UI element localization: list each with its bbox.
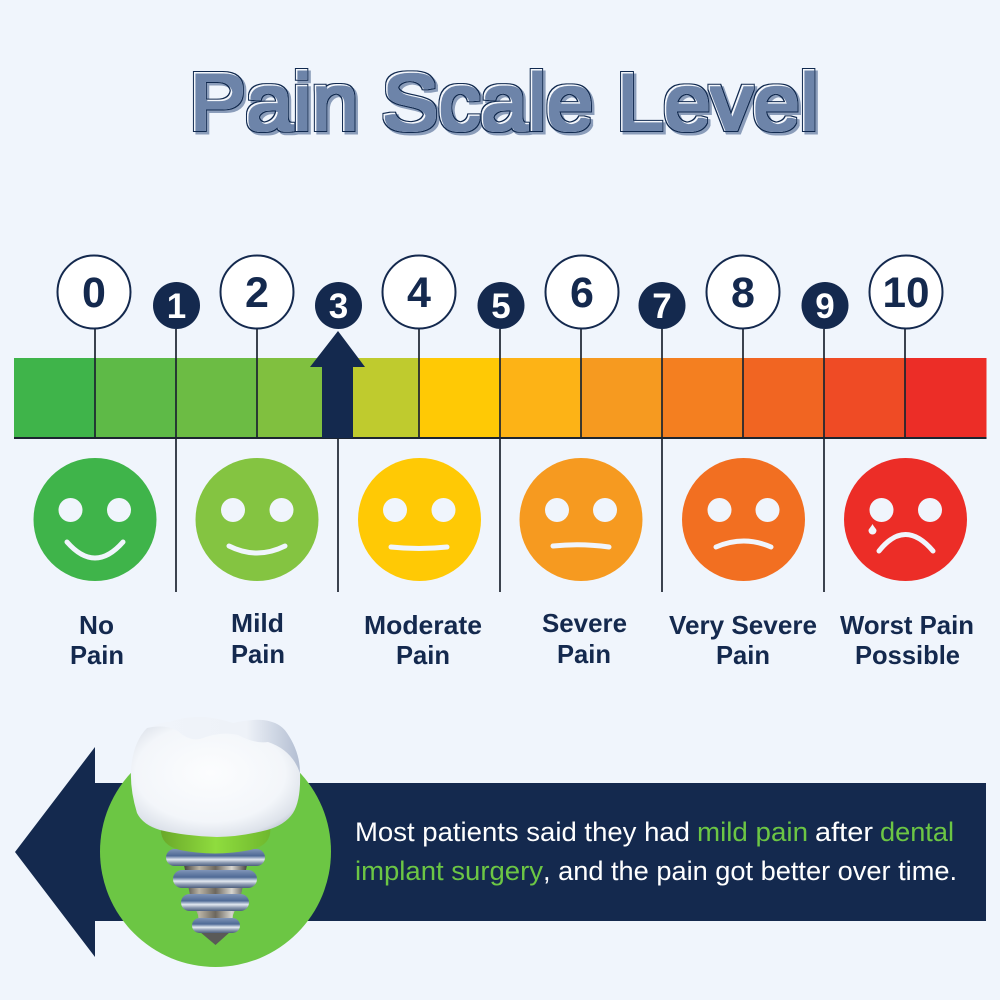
icon: dental implant — [131, 717, 300, 945]
label: mild pain: Pain — [231, 639, 285, 669]
number 1 — [153, 282, 200, 329]
callout text: Most patients said they had — [355, 817, 690, 847]
number 10 — [870, 256, 942, 328]
face: mild pain — [196, 458, 318, 581]
number 4: 4 — [407, 269, 431, 317]
callout text: after — [815, 817, 873, 847]
callout text: implant surgery — [355, 856, 544, 886]
scale tick lines — [95, 329, 905, 592]
label: moderate pain: Moderate — [364, 610, 482, 640]
label: severe pain: Pain — [557, 639, 611, 669]
label: worst pain possible — [840, 610, 974, 670]
number 6 — [546, 256, 618, 328]
label: no pain — [70, 610, 124, 670]
number 3: 3 — [329, 287, 348, 326]
number 10: 10 — [882, 269, 930, 317]
callout text: , and the pain got better over time. — [543, 856, 957, 886]
number 6: 6 — [570, 269, 594, 317]
label: very severe pain — [669, 610, 817, 670]
callout text: mild pain — [697, 817, 808, 847]
number 4 — [382, 256, 456, 328]
face: no pain — [34, 458, 156, 581]
number 9 — [802, 282, 848, 329]
label: moderate pain: Pain — [396, 640, 450, 670]
face: very severe pain — [682, 458, 805, 581]
label: very severe pain: Pain — [716, 640, 770, 670]
label: severe pain: Severe — [542, 608, 627, 638]
number 5 — [478, 282, 524, 329]
label: mild pain — [231, 608, 285, 669]
label: very severe pain: Very Severe — [669, 610, 817, 640]
label: no pain: No — [79, 610, 114, 640]
face: moderate pain — [358, 458, 481, 581]
label: no pain: Pain — [70, 640, 124, 670]
face: worst pain possible — [844, 458, 967, 581]
title: Pain Scale Level — [189, 57, 818, 146]
callout arrow banner — [15, 747, 986, 957]
number 0 — [58, 256, 130, 328]
number 7: 7 — [652, 287, 672, 326]
number 5: 5 — [491, 287, 511, 326]
number 3 — [315, 282, 362, 329]
number 2: 2 — [245, 269, 269, 317]
number 8 — [706, 256, 780, 328]
pain scale colour bar — [14, 358, 986, 439]
label: moderate pain — [364, 610, 482, 670]
tooth crown — [131, 717, 300, 837]
level 3 arrow marker — [310, 331, 365, 438]
callout text — [355, 817, 957, 886]
callout text: dental — [880, 817, 954, 847]
label: mild pain: Mild — [231, 608, 284, 638]
green collar — [161, 826, 270, 854]
number 2 — [220, 256, 294, 328]
green circle — [100, 736, 331, 967]
number 8: 8 — [731, 269, 755, 317]
number 9: 9 — [815, 287, 835, 326]
face: severe pain — [520, 458, 642, 581]
number 1: 1 — [167, 287, 186, 326]
number 0: 0 — [82, 269, 106, 317]
label: severe pain — [542, 608, 627, 669]
label: worst pain possible: Possible — [855, 640, 960, 670]
label: worst pain possible: Worst Pain — [840, 610, 974, 640]
number 7 — [638, 282, 686, 329]
implant screw — [166, 849, 265, 945]
